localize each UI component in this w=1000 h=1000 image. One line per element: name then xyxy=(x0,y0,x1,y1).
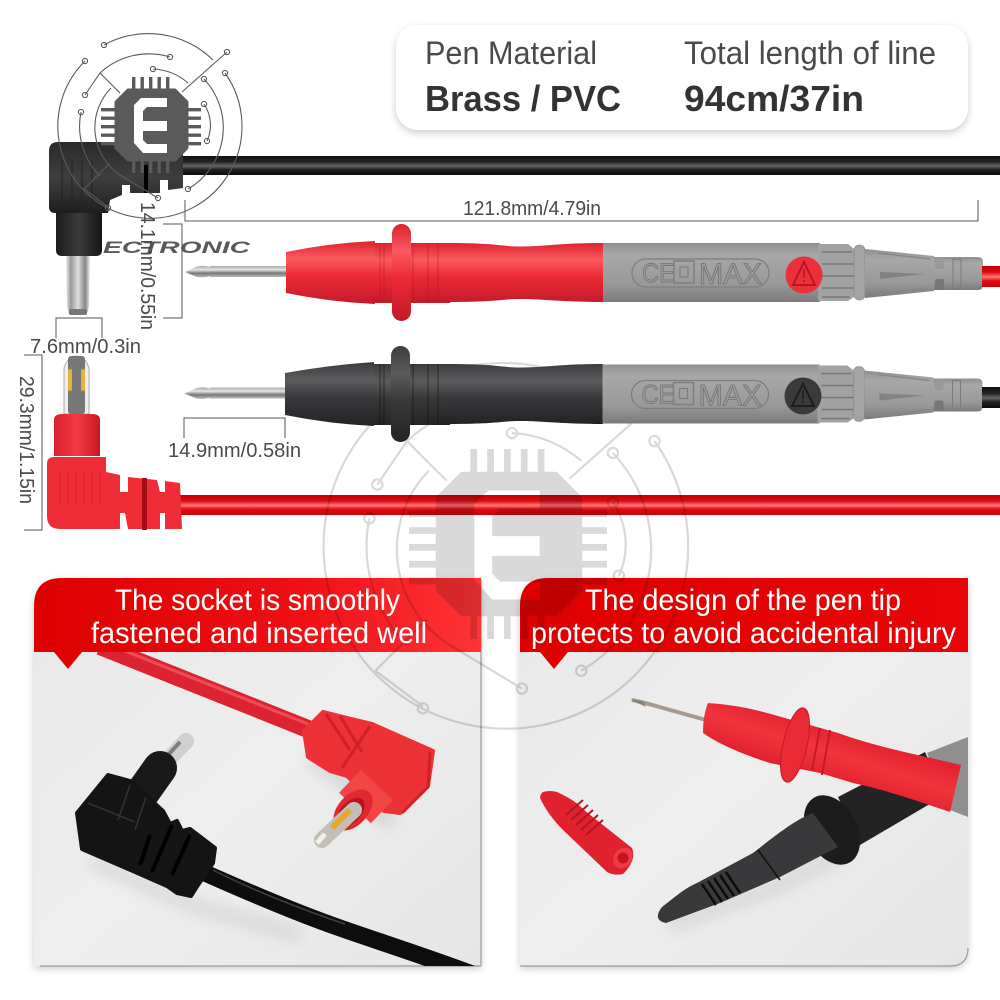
dimension: overall length: 121.8mm/4.79in xyxy=(463,198,601,220)
dimension: probe diameter: 14.1mm/0.55in xyxy=(136,202,158,330)
brand text: ECTRONIC xyxy=(103,238,251,257)
photo: red probe with needle xyxy=(630,699,961,812)
dimension: needle length xyxy=(168,418,301,462)
heading: socket: fastened and inserted well xyxy=(91,617,427,650)
dimension: probe diameter xyxy=(136,202,182,330)
text: pen material: Brass / PVC xyxy=(425,78,621,119)
photo: black probe tip xyxy=(658,737,968,925)
heading: socket: The socket is smoothly xyxy=(115,584,400,617)
warning badge: red xyxy=(786,256,822,294)
panel: pen tip photo xyxy=(520,578,968,966)
red probe xyxy=(185,224,1000,321)
dimension: plug height: 29.3mm/1.15in xyxy=(15,376,37,504)
dimension: plug height xyxy=(15,355,42,530)
warning badge: black xyxy=(784,378,822,414)
text: pen material xyxy=(425,35,621,119)
dimension: needle length: 14.9mm/0.58in xyxy=(168,440,301,462)
black cable xyxy=(180,156,1000,175)
photo: red protective cap xyxy=(540,791,637,875)
photo: red test lead with angled socket xyxy=(100,641,433,843)
header: socket panel xyxy=(34,578,481,669)
watermark: large circuit logo xyxy=(324,363,688,729)
heading: pen tip: protects to avoid accidental injury xyxy=(531,617,956,650)
heading: pen tip: The design of the pen tip xyxy=(585,584,901,617)
dimension: plug diameter: 7.6mm/0.3in xyxy=(30,336,141,358)
red angled plug xyxy=(47,356,182,530)
panel: socket photo xyxy=(34,578,481,975)
text: total length: Total length of line xyxy=(684,35,936,71)
dimension: plug diameter xyxy=(30,318,141,358)
text: pen material: Pen Material xyxy=(425,35,597,71)
black probe xyxy=(184,346,1000,442)
watermark: small circuit logo xyxy=(58,34,242,218)
info card: material and length xyxy=(396,25,968,130)
text: total length: 94cm/37in xyxy=(684,78,864,119)
text: total length xyxy=(684,35,936,119)
red cable xyxy=(178,495,1000,515)
dimension: overall length xyxy=(185,198,978,221)
header: pen tip panel xyxy=(520,578,968,669)
photo: black test lead with angled socket xyxy=(77,741,475,975)
black angled plug xyxy=(49,142,183,315)
